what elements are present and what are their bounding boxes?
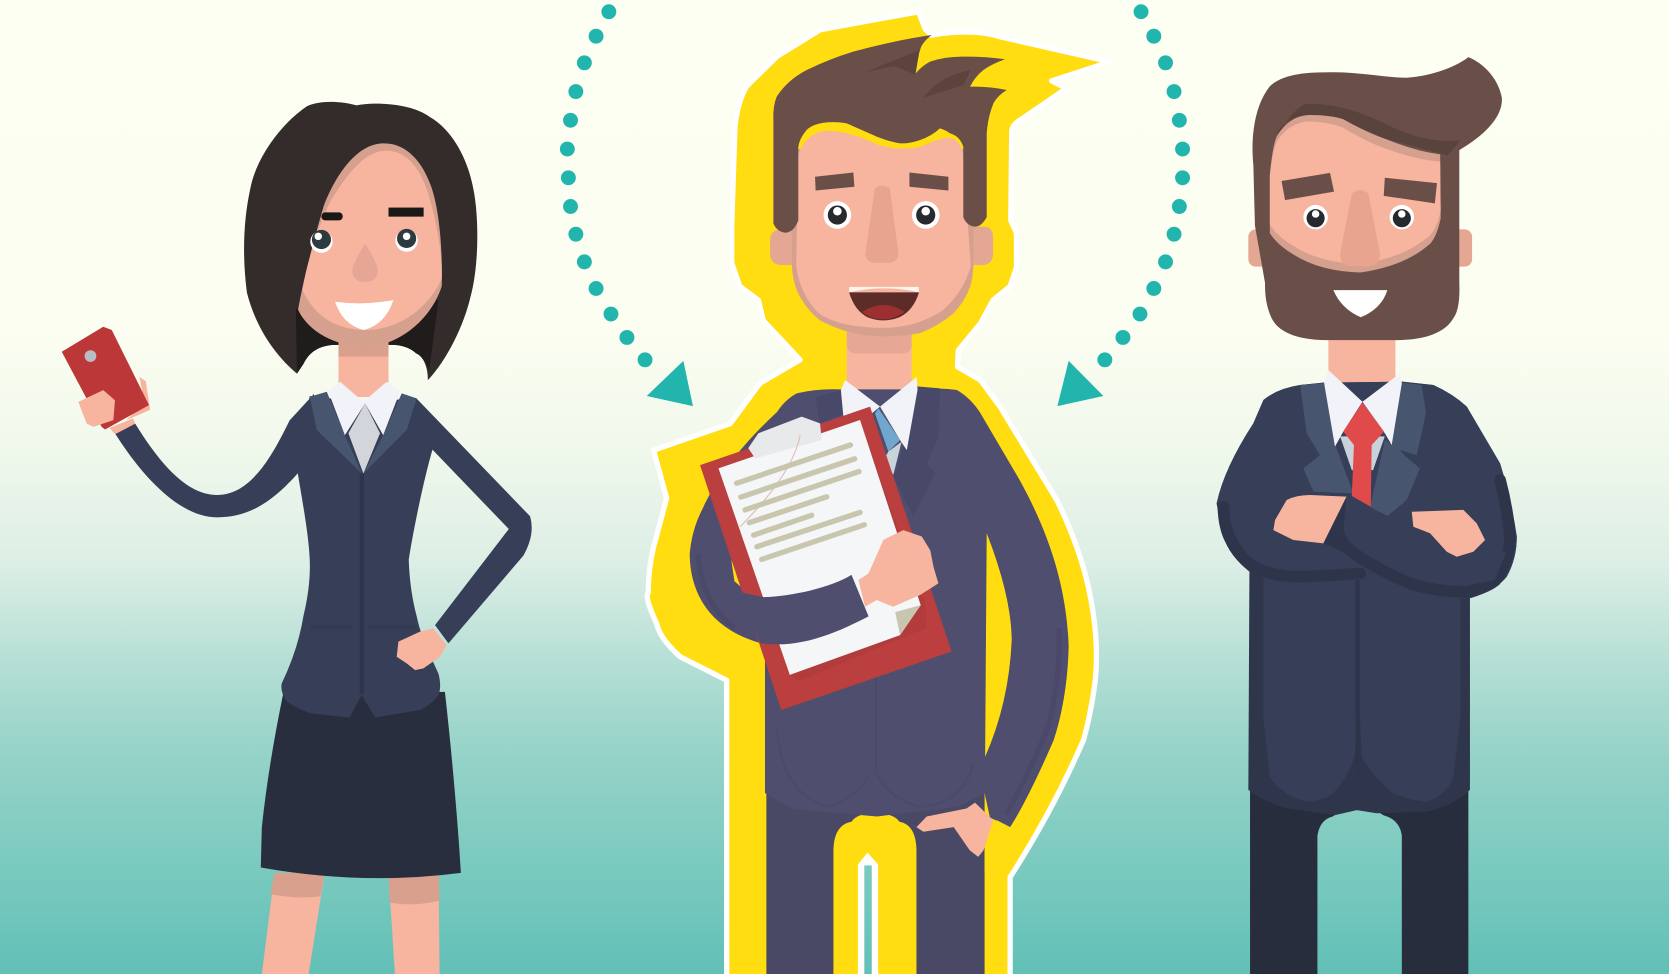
yellow gap between arm and torso	[985, 533, 1012, 757]
woman lapels	[310, 392, 417, 473]
clip	[748, 417, 822, 458]
dotted arrow: right	[1057, 4, 1190, 406]
bearded man left hand	[1273, 495, 1346, 543]
bearded man smile	[1333, 290, 1387, 317]
paper fold	[895, 605, 921, 635]
man collar and tie	[841, 377, 918, 475]
character: central man with clipboard	[690, 35, 1069, 974]
gap between legs	[1317, 809, 1402, 974]
man hand at pocket	[916, 803, 993, 857]
man open mouth	[849, 287, 919, 320]
bearded man eyes	[1303, 205, 1414, 229]
bearded man jacket	[1217, 382, 1517, 815]
bearded man hair and beard	[1253, 57, 1502, 340]
bearded man right hand	[1412, 510, 1485, 557]
character: bearded man with crossed arms	[1217, 57, 1517, 974]
man eyebrows	[815, 172, 948, 191]
highlight: yellow cut-out outline around central man	[647, 12, 1110, 974]
man hair	[773, 35, 1007, 233]
bearded man legs	[1250, 782, 1468, 974]
yellow gap between legs	[833, 813, 916, 974]
jacket seams	[777, 660, 973, 807]
character: woman with phone	[62, 102, 532, 974]
text lines	[737, 445, 864, 559]
arm shading	[698, 554, 1059, 814]
woman hand on hip	[397, 628, 447, 670]
man torso and far arm	[690, 389, 1069, 827]
bearded man forearm inner shadow	[1323, 497, 1357, 559]
bearded man dark arm bands	[1223, 480, 1510, 592]
woman hair	[244, 102, 477, 380]
small yellow behind pocket hand	[985, 820, 1010, 873]
clipboard	[700, 407, 952, 710]
man face	[792, 131, 973, 336]
bearded man shirt and tie	[1324, 370, 1402, 507]
paper	[718, 420, 921, 675]
woman skirt	[261, 692, 461, 878]
icon: phone with hand	[62, 327, 150, 434]
small yellow gap at elbow	[731, 560, 743, 589]
jacket darker lapels	[815, 386, 940, 517]
bearded man neck	[1328, 330, 1395, 402]
man hand on clipboard	[858, 530, 938, 607]
bearded man nose	[1340, 190, 1380, 266]
woman hip arm	[416, 398, 532, 643]
paper crease	[740, 435, 800, 527]
dotted arrow: left	[560, 4, 693, 406]
woman jacket	[281, 396, 440, 717]
woman eyes and brows	[310, 208, 424, 253]
man forearm	[740, 575, 869, 644]
bearded man hair shading	[1270, 104, 1460, 176]
woman shirt	[328, 382, 400, 473]
woman raised arm	[115, 394, 315, 517]
man neck	[847, 325, 912, 401]
bearded man eyebrows	[1282, 173, 1437, 203]
bearded man crossed forearm	[1343, 497, 1506, 585]
jacket centre seam	[1356, 580, 1360, 782]
jacket lower panels	[1263, 720, 1460, 802]
woman smile	[335, 300, 393, 330]
cut-out gap	[858, 853, 878, 974]
woman nose	[352, 244, 378, 282]
woman legs	[262, 873, 440, 974]
man legs	[766, 788, 985, 974]
man nose	[865, 186, 898, 263]
bearded man face	[1270, 115, 1441, 273]
jacket upper fill	[1217, 382, 1517, 720]
woman face	[298, 143, 442, 347]
woman neck	[338, 335, 389, 397]
bearded man lapels	[1300, 383, 1426, 517]
man eyes	[824, 201, 940, 229]
man ears	[770, 227, 993, 265]
bearded man ears	[1248, 229, 1472, 267]
